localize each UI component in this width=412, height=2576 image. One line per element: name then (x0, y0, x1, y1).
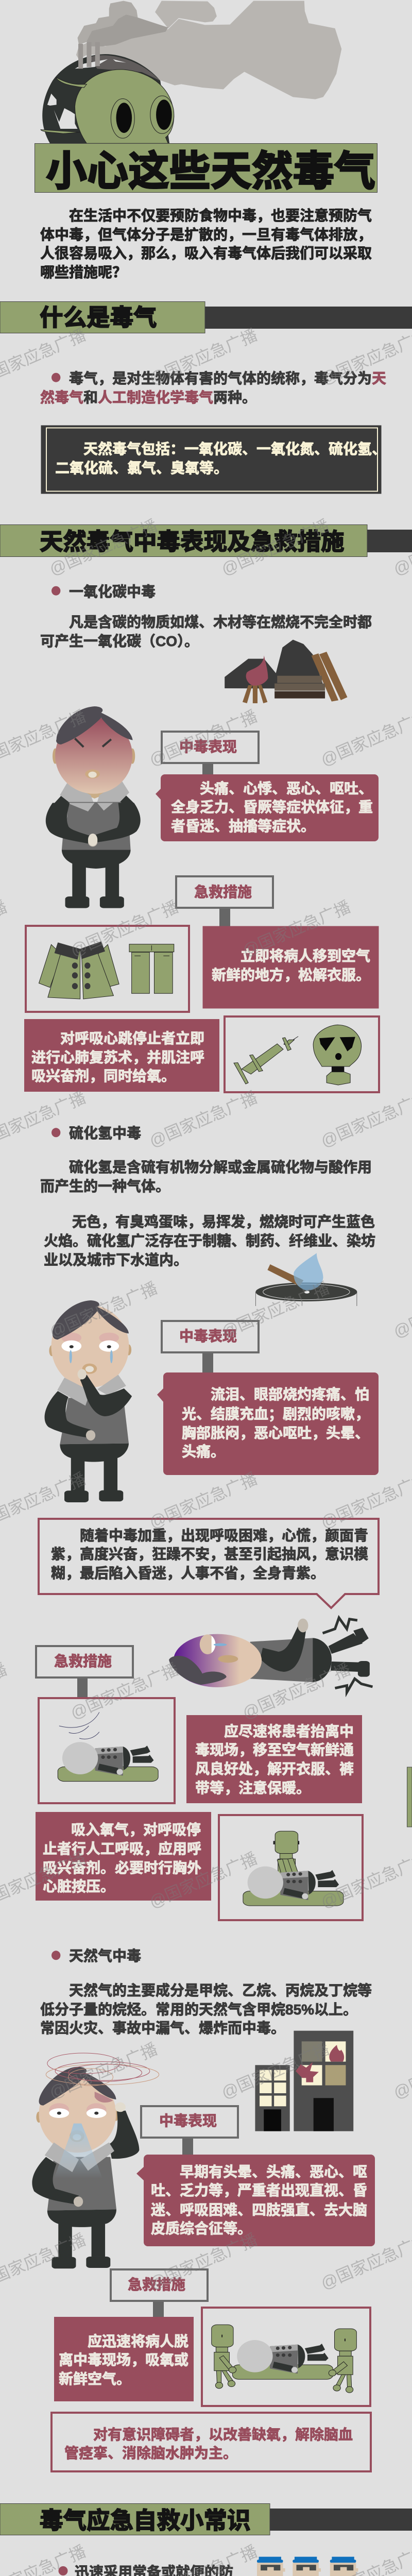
text panel: CPR: 吸兴奋剂，同时给氧。 (31, 1068, 176, 1084)
character: natural gas victim (32, 2053, 159, 2268)
definition text: 毒气，是对生物体有害的气体的统称，毒气分为天 (69, 370, 386, 386)
character: hydrogen sulfide victim (45, 1300, 132, 1502)
panel: natural toxic gases (41, 426, 386, 494)
watermarks: @国家应急广播 (219, 1279, 332, 1341)
intro text (40, 208, 372, 280)
watermarks: @国家应急广播 (68, 897, 181, 960)
section heading: what is toxic gas: 什么是毒气 (40, 304, 157, 331)
text panel: move patient away: 应尽速将患者抬离中 (224, 1723, 354, 1739)
intro text: 人很容易吸入，那么，吸入有毒气体后我们可以采取 (40, 245, 372, 261)
intro text: 体中毒，但气体分子是扩散的，一旦有毒气体排放， (40, 227, 372, 243)
section heading: symptoms and first aid: 天然毒气中毒表现及急救措施 (40, 529, 345, 555)
hydrogen sulfide heading and text: 硫化氢中毒 (69, 1125, 141, 1141)
callout: severe symptoms (39, 1519, 379, 1608)
text panel: move patient away: 毒现场，移至空气新鲜通 (195, 1742, 354, 1758)
section heading: what is toxic gas (0, 302, 412, 333)
watermarks: @国家应急广播 (47, 2040, 160, 2102)
callout: hydrogen sulfide symptoms: 胸部胀闷，恶心呕吐，头晕、 (182, 1425, 369, 1441)
sign: first aid (36, 1646, 133, 1698)
panel: two rescuers carrying a stretcher (202, 2308, 370, 2406)
panel: patient on stretcher with airflow (39, 1698, 175, 1803)
text panel: leave poison site: 新鲜空气。 (59, 2371, 131, 2387)
sign: symptoms: 中毒表现 (179, 1328, 237, 1344)
smoke cloud (76, 1, 341, 99)
definition text: 然毒气和人工制造化学毒气两种。 (40, 389, 256, 405)
watermarks: @国家应急广播 (147, 2230, 260, 2293)
sign: first aid (176, 876, 273, 926)
panel: chest compression illustration (219, 1815, 363, 1920)
hydrogen sulfide heading and text: 而产生的一种气体。 (40, 1178, 170, 1194)
carbon monoxide heading and text: 凡是含碳的物质如煤、木材等在燃烧不完全时都 (69, 614, 372, 630)
callout: carbon monoxide symptoms (156, 774, 379, 841)
callout: severe symptoms: 糊，最后陷入昏迷，人事不省，全身青紫。 (51, 1565, 325, 1581)
callout: hydrogen sulfide symptoms: 光、结膜充血；剧烈的咳嗽， (182, 1406, 369, 1422)
text panel: move patient away (186, 1715, 362, 1803)
text panel: move to fresh air: 立即将病人移到空气 (241, 948, 370, 964)
callout: natural gas symptoms: 吐、乏力等，严重者出现直视、昏 (151, 2182, 367, 2198)
watermarks: @国家应急广播 (47, 516, 160, 579)
watermarks: @国家应急广播 (68, 1660, 181, 1722)
natural gas heading and text: 天然气的主要成分是甲烷、乙烷、丙烷及丁烷等 (69, 1982, 372, 1998)
callout: natural gas symptoms: 早期有头晕、头痛、恶心、呕 (180, 2164, 367, 2180)
text panel: CPR (24, 1019, 219, 1092)
sign: symptoms (162, 732, 259, 775)
callout: hydrogen sulfide symptoms: 流泪、眼部烧灼疼痛、怕 (211, 1386, 369, 1402)
callout: natural gas symptoms: 迷、呼吸困难、四肢强直、去大脑 (151, 2202, 367, 2218)
callout: carbon monoxide symptoms: 者昏迷、抽搐等症状。 (171, 818, 315, 834)
callout: natural gas symptoms: 皮质综合征等。 (151, 2221, 252, 2236)
watermarks: @国家应急广播 (47, 1279, 160, 1341)
panel: natural toxic gases: 天然毒气包括：一氧化碳、一氧化氮、硫化氢、 (83, 441, 386, 457)
hydrogen sulfide heading and text: 火焰。硫化氢广泛存在于制糖、制药、纤维业、染坊 (44, 1233, 375, 1249)
watermarks: @国家应急广播 (147, 1849, 260, 1911)
section heading: symptoms and first aid (0, 524, 412, 556)
natural gas heading and text: 天然气中毒 (69, 1948, 141, 1964)
watermarks: @国家应急广播 (240, 897, 353, 960)
definition text (40, 370, 386, 405)
panel: natural toxic gases: 二氧化硫、氯气、臭氧等。 (55, 460, 228, 476)
text panel: leave poison site: 离中毒现场，吸氧或 (59, 2351, 188, 2368)
panel: treatment note: 管痉挛、消除脑水肿为主。 (64, 2445, 237, 2461)
natural gas heading and text: 低分子量的烷烃。常用的天然气含甲烷85%以上。 (40, 2002, 357, 2018)
text panel: CPR: 对呼吸心跳停止者立即 (60, 1030, 204, 1046)
text panel: oxygen and chest compression: 吸入氧气，对呼吸停 (71, 1822, 201, 1838)
section heading: self-rescue tips (0, 2504, 412, 2535)
callout: severe symptoms: 随着中毒加重，出现呼吸困难，心慌，颜面青 (80, 1528, 368, 1544)
text panel: move to fresh air (203, 926, 379, 1009)
sign: first aid: 急救措施 (128, 2277, 185, 2293)
sign: first aid (111, 2269, 208, 2317)
callout: natural gas symptoms (136, 2155, 375, 2246)
icon: coal, wood and flame (225, 640, 347, 703)
watermarks: @国家应急广播 (147, 326, 260, 388)
panel: treatment note: 对有意识障碍者，以改善缺氧，解除脑血 (93, 2427, 353, 2443)
icon: three protective workers (257, 2557, 358, 2576)
watermarks: @国家应急广播 (240, 1660, 353, 1722)
hydrogen sulfide heading and text: 无色，有臭鸡蛋味，易挥发，燃烧时可产生蓝色 (72, 1214, 375, 1230)
hydrogen sulfide heading and text (40, 1125, 375, 1268)
sign: symptoms: 中毒表现 (159, 2113, 217, 2129)
text panel: oxygen and chest compression: 止者行人工呼吸，应用呼 (43, 1841, 201, 1857)
callout: carbon monoxide symptoms: 全身乏力、昏厥等症状体征，重 (171, 799, 373, 815)
text panel: leave poison site (54, 2317, 194, 2401)
panel: syringe and gas mask (225, 1016, 379, 1092)
intro text: 哪些措施呢？ (40, 264, 127, 280)
sign: symptoms: 中毒表现 (179, 739, 237, 755)
callout: severe symptoms: 紫，高度兴奋，狂躁不安，甚至引起抽风，意识模 (51, 1546, 368, 1562)
carbon monoxide heading and text: 可产生一氧化碳（CO）。 (40, 633, 199, 649)
text panel: move to fresh air: 新鲜的地方，松解衣服。 (212, 967, 370, 983)
natural gas heading and text (40, 1948, 372, 2036)
watermarks: @国家应急广播 (219, 516, 332, 579)
text panel: CPR: 进行心肺复苏术，并肌注呼 (31, 1049, 204, 1065)
watermarks: @国家应急广播 (219, 2040, 332, 2102)
text panel: move patient away: 带等，注意保暖。 (195, 1780, 311, 1796)
text panel: oxygen and chest compression: 心脏按压。 (43, 1878, 115, 1894)
illustration: polluted globe wearing a gas mask (41, 1, 341, 143)
text panel: leave poison site: 应迅速将病人脱 (88, 2333, 188, 2349)
carbon monoxide heading and text (40, 584, 372, 649)
sign: symptoms (141, 2106, 238, 2155)
callout: hydrogen sulfide symptoms (157, 1372, 379, 1475)
gas mask (41, 70, 174, 143)
icon: burning buildings (255, 2031, 353, 2131)
callout: carbon monoxide symptoms: 头痛、心悸、恶心、呕吐、 (200, 781, 373, 796)
hydrogen sulfide heading and text: 硫化氢是含硫有机物分解或金属硫化物与酸作用 (69, 1159, 372, 1175)
watermarks: @国家应急广播 (147, 1469, 260, 1532)
panel: treatment note (52, 2413, 371, 2471)
watermarks: @国家应急广播 (147, 1088, 260, 1150)
icon: blue flame over sewer (255, 1253, 357, 1306)
sign: symptoms (162, 1321, 259, 1373)
natural gas heading and text: 常因火灾、事故中漏气、爆炸而中毒。 (40, 2020, 285, 2036)
section heading: self-rescue tips: 毒气应急自救小常识 (40, 2507, 251, 2534)
character: carbon monoxide victim (46, 706, 141, 908)
callout: hydrogen sulfide symptoms: 头痛。 (182, 1444, 225, 1460)
title banner: 小心这些天然毒气 (46, 148, 375, 194)
chimneys (78, 42, 100, 69)
text panel: oxygen and chest compression: 吸兴奋剂。必要时行胸外 (43, 1860, 201, 1876)
carbon monoxide heading and text: 一氧化碳中毒 (69, 584, 156, 600)
intro text: 在生活中不仅要预防食物中毒，也要注意预防气 (69, 208, 372, 224)
globe (42, 54, 169, 143)
watermarks: @国家应急广播 (147, 707, 260, 769)
panel: clothes illustration (26, 926, 189, 1012)
text panel: oxygen and chest compression (36, 1812, 211, 1901)
sign: first aid: 急救措施 (194, 884, 252, 900)
hydrogen sulfide heading and text: 业以及城市下水道内。 (44, 1252, 188, 1268)
text panel: move patient away: 风良好处，解开衣服、裤 (195, 1761, 354, 1777)
edge sliver (407, 1767, 412, 1827)
sign: first aid: 急救措施 (54, 1653, 112, 1669)
character: convulsing victim (169, 1618, 372, 1692)
